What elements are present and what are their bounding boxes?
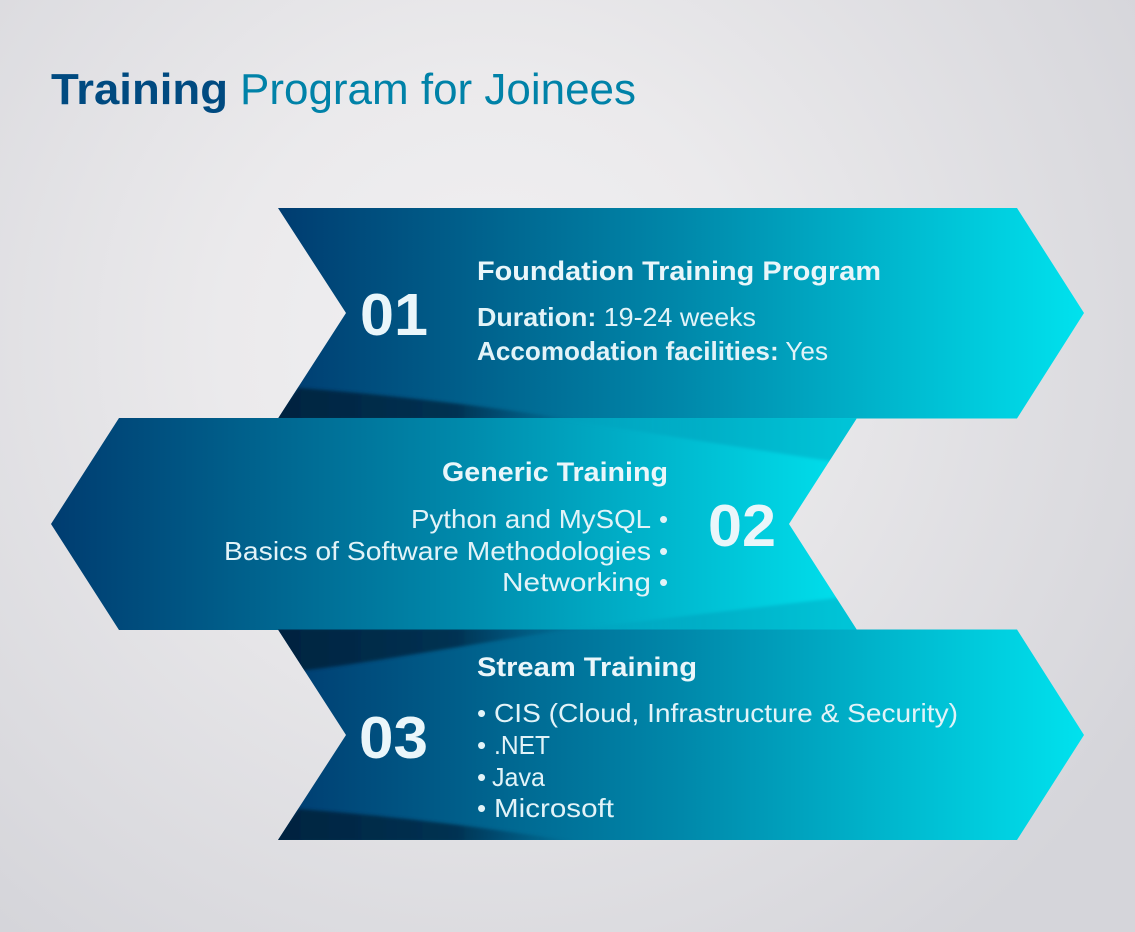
list item: python and mysql: Python and MySQL [411, 504, 651, 534]
arrow 03 bottom shadow [278, 808, 551, 840]
arrow 01 shadow [278, 386, 548, 418]
list item: java: • [477, 762, 486, 792]
arrow 03 shape [278, 630, 1084, 840]
list item: java: Java [492, 762, 546, 792]
title regular part: Program for Joinees [240, 65, 636, 114]
text: duration: Duration: 19-24 weeks [477, 302, 756, 332]
text: accommodation: Accomodation facilities: Yes [477, 336, 828, 366]
arrow 02 shape [51, 418, 857, 630]
number 03: 03 [359, 705, 428, 771]
panel: 03 stream training [270, 628, 1084, 842]
title bold part: Training [51, 65, 228, 114]
list item: .net: .NET [494, 730, 550, 760]
list item: microsoft: Microsoft [494, 793, 615, 823]
number 02: 02 [708, 493, 776, 559]
heading: stream training: Stream Training [477, 652, 697, 682]
arrow 03 top shadow [278, 630, 552, 672]
list item: microsoft: • [477, 793, 486, 823]
arrow 02 top shade [644, 418, 857, 462]
list item: .net: • [477, 730, 486, 760]
number 01: 01 [360, 282, 428, 348]
list item: python and mysql: • [659, 504, 668, 534]
heading: foundation training program: Foundation Training Program [477, 256, 881, 286]
panel: 02 generic training [51, 416, 870, 632]
arrow 02 bottom shade [644, 598, 856, 630]
arrow 01 shape [278, 208, 1084, 418]
list item: software methodologies: • [659, 536, 668, 566]
list item: networking: Networking [502, 567, 651, 597]
title [51, 65, 636, 114]
panel: 01 foundation training [270, 208, 1084, 420]
list item: software methodologies: Basics of Software Methodologies [224, 536, 651, 566]
list item: cis: CIS (Cloud, Infrastructure & Security) [494, 698, 958, 728]
list item: networking: • [659, 567, 668, 597]
heading: generic training: Generic Training [442, 457, 668, 487]
list item: cis: • [477, 698, 486, 728]
